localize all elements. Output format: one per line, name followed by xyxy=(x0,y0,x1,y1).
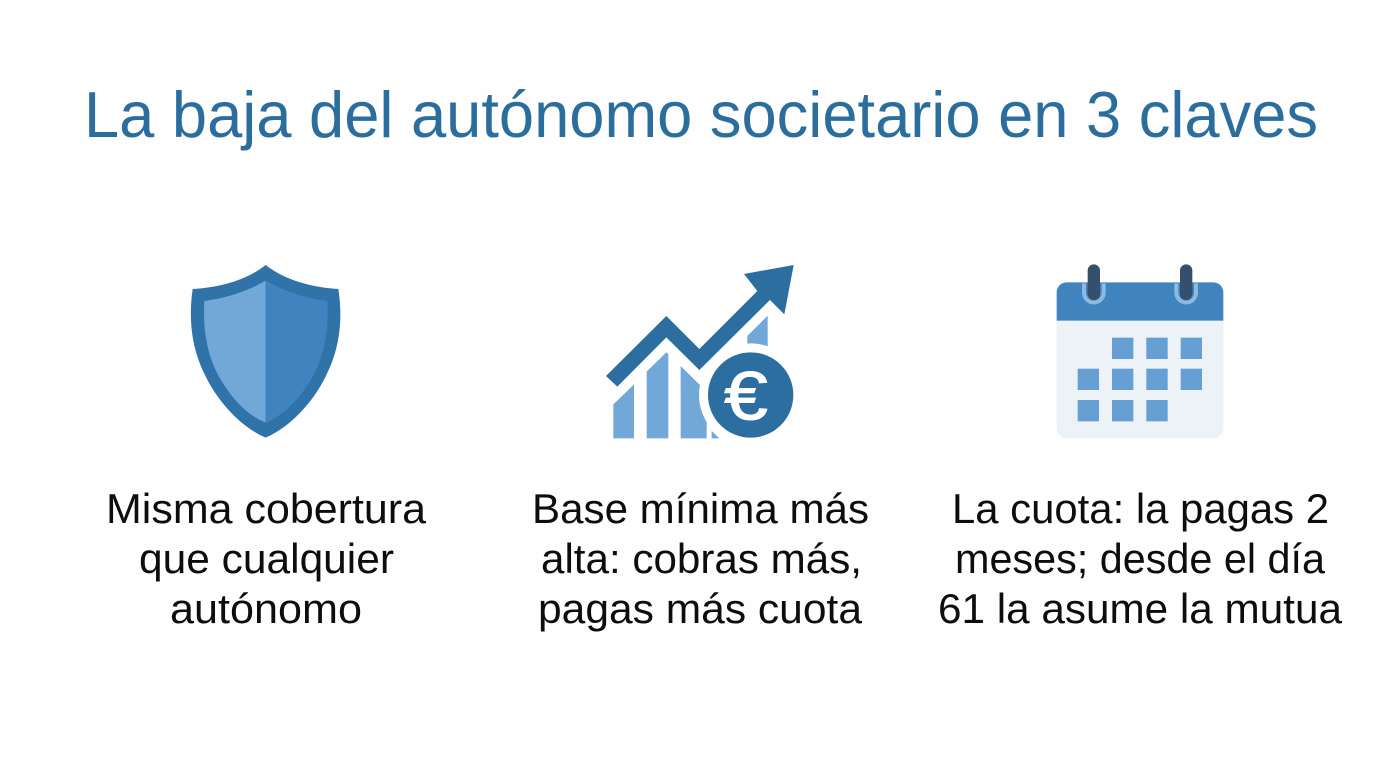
panel: misma cobertura xyxy=(106,265,427,632)
text: misma cobertura: que cualquier xyxy=(139,535,394,582)
text: base mínima: pagas más cuota xyxy=(538,585,863,632)
text: base mínima: alta: cobras más, xyxy=(541,535,862,582)
text: la cuota xyxy=(938,485,1343,632)
panel: base mínima xyxy=(532,265,869,632)
icon: calendar xyxy=(1057,264,1223,438)
text: misma cobertura xyxy=(106,485,427,632)
icon: rising chart with euro: € xyxy=(724,357,768,434)
text: la cuota: La cuota: la pagas 2 xyxy=(952,485,1329,532)
icon: rising chart with euro xyxy=(606,265,802,447)
icon: shield xyxy=(191,265,340,438)
panel: la cuota xyxy=(938,264,1343,632)
text: base mínima xyxy=(532,485,869,632)
title: La baja del autónomo societario en 3 claves xyxy=(84,78,1318,151)
text: la cuota: meses; desde el día xyxy=(955,535,1326,582)
text: la cuota: 61 la asume la mutua xyxy=(938,585,1343,632)
text: misma cobertura: autónomo xyxy=(170,585,362,632)
text: base mínima: Base mínima más xyxy=(532,485,869,532)
text: misma cobertura: Misma cobertura xyxy=(106,485,427,532)
